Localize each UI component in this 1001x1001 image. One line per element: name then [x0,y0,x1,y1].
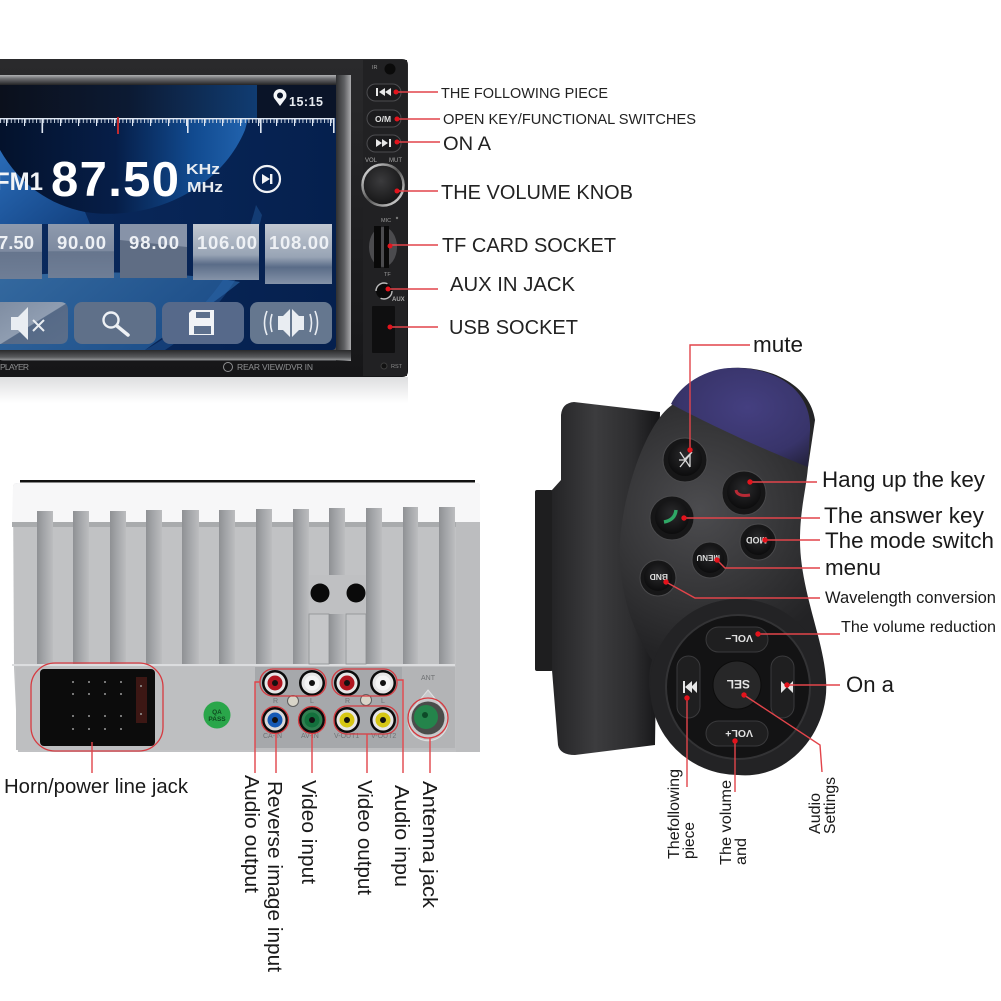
button: hang up [722,471,766,515]
mounting block with holes [309,575,366,664]
jack captions: ANT [421,675,436,682]
label: the volume and: The volume [718,780,735,865]
label: following piece: THE FOLLOWING PIECE [441,85,608,102]
purple cap [671,368,810,467]
leader dots [663,447,790,744]
callouts: head unit [386,85,696,339]
jack captions: CA-IN [263,733,282,740]
button: volume up: VOL+ [725,727,753,739]
icon: mute speaker [11,307,44,340]
leader lines [92,680,430,773]
button: select: SEL [727,677,750,691]
volume labels: VOL [365,158,378,164]
label: video output: Video output [353,780,375,895]
button: previous [367,84,401,101]
reflection below the head unit [0,377,408,403]
label: audio output: Audio output [240,775,262,893]
fabric strap [535,490,553,671]
TF label: TF [384,272,391,278]
icon: next circle [254,166,280,192]
leader lines [666,345,840,792]
radio screen [0,85,336,350]
jack captions: L [310,698,314,705]
icon: floppy disk [189,310,214,335]
device casing [0,59,408,377]
preset buttons: 108.00 [269,232,329,253]
button: select [713,661,761,709]
label: hang up: Hang up the key [822,467,985,492]
panel screws [288,694,372,706]
power connector [40,669,155,746]
label: horn/power line jack: Horn/power line jack [4,776,189,798]
jack captions: R [345,698,350,705]
icon: search [104,312,128,335]
QA sticker [204,702,230,728]
button: next track [771,656,794,718]
button: volume down: VOL− [725,632,753,644]
preset buttons [0,224,332,284]
silver screen frame [0,75,351,361]
label: volume knob: THE VOLUME KNOB [441,182,633,204]
RCA jacks [262,670,396,733]
label: tf card socket: TF CARD SOCKET [442,235,616,257]
preset buttons: 90.00 [57,232,106,253]
button: band [640,560,676,596]
button: volume down [706,627,768,652]
QA sticker: QA [212,709,222,716]
QA sticker: PASS [208,716,226,723]
button: open/mode [367,110,401,127]
button: mode: MOD [746,535,767,545]
label: wavelength conversion: Wavelength conversion [825,589,996,607]
label: the following piece [666,769,698,859]
volume labels [365,158,402,164]
USB socket [372,306,395,353]
top edge [20,480,475,482]
clamp block [552,402,660,755]
label: audio settings: Audio [807,793,824,834]
callouts: remote [663,332,996,865]
tuning scale [0,117,335,134]
TF card slot [369,226,397,268]
curved body [620,368,826,775]
callouts: rear [4,663,448,972]
antenna panel [402,667,455,748]
icon: speakers [264,309,318,337]
label: menu: menu [825,555,881,580]
antenna jack [408,690,448,741]
button: volume up [706,721,768,746]
right control strip [362,60,407,376]
panel: rear of unit [12,480,480,752]
unit labels: KHz [186,161,220,178]
jack captions: V-OUT2 [371,733,396,740]
clock: 15:15 [289,95,323,109]
button: mode [740,524,776,560]
button: open/mode: O/M [375,114,391,124]
volume labels: MUT [389,158,402,164]
frequency readout: 87.50 [51,153,179,207]
heat sink fins [37,507,455,664]
button: menu [692,542,728,578]
unit labels: MHz [187,179,223,196]
jack captions [263,675,436,740]
label: antenna jack: Antenna jack [418,781,440,909]
label: the following piece: Thefollowing [666,769,683,859]
label: audio settings [807,777,839,834]
function buttons [0,302,332,344]
icon: location pin [274,89,286,106]
label: usb socket: USB SOCKET [449,317,578,339]
button: band: BND [650,572,668,582]
label: audio input: Audio inpu [390,785,412,887]
preset buttons: 106.00 [197,232,257,253]
jack captions: AV-IN [301,733,319,740]
panel: steering wheel remote [535,368,826,775]
IR sensor [372,64,396,74]
jack captions: R [273,698,278,705]
volume knob [362,164,404,206]
lower plate [16,667,456,750]
button: menu: MENU [696,553,720,562]
frame print: player: PLAYER [0,362,29,372]
label: mute: mute [753,332,803,357]
highlight outlines [31,663,448,751]
chassis [12,483,480,752]
control pad [650,599,826,775]
label: the volume and [718,780,750,865]
button: mute [663,438,707,482]
label: reverse image input: Reverse image input [263,781,286,972]
label: mode switch: The mode switch [825,528,994,553]
label: on a: ON A [443,133,491,155]
label: volume reduction: The volume reduction [841,619,996,636]
MIC label [381,217,398,224]
reset label [381,363,403,370]
unit labels [186,161,223,196]
jack captions: V-OUT1 [334,733,359,740]
preset buttons: 98.00 [129,232,179,253]
button: next [367,135,401,152]
button: answer [650,496,694,540]
MIC label: MIC [381,218,391,224]
label: open key: OPEN KEY/FUNCTIONAL SWITCHES [443,111,696,128]
panel: head unit front [0,59,408,403]
AUX jack [376,283,405,303]
AUX jack: AUX [392,297,405,303]
button: previous track [677,656,700,718]
IR sensor: IR [372,65,378,71]
label: answer: The answer key [824,503,984,528]
label: the following piece: piece [681,822,698,859]
label: aux in jack: AUX IN JACK [450,274,576,296]
label: audio settings: Settings [822,777,839,834]
label: the volume and: and [733,838,750,865]
RCA panel [255,667,402,748]
reset label: RST [391,364,403,370]
label: video input: Video input [297,780,319,884]
frame print: rear view: REAR VIEW/DVR IN [237,362,313,372]
jack captions: L [381,698,385,705]
label: on a: On a [846,672,895,697]
